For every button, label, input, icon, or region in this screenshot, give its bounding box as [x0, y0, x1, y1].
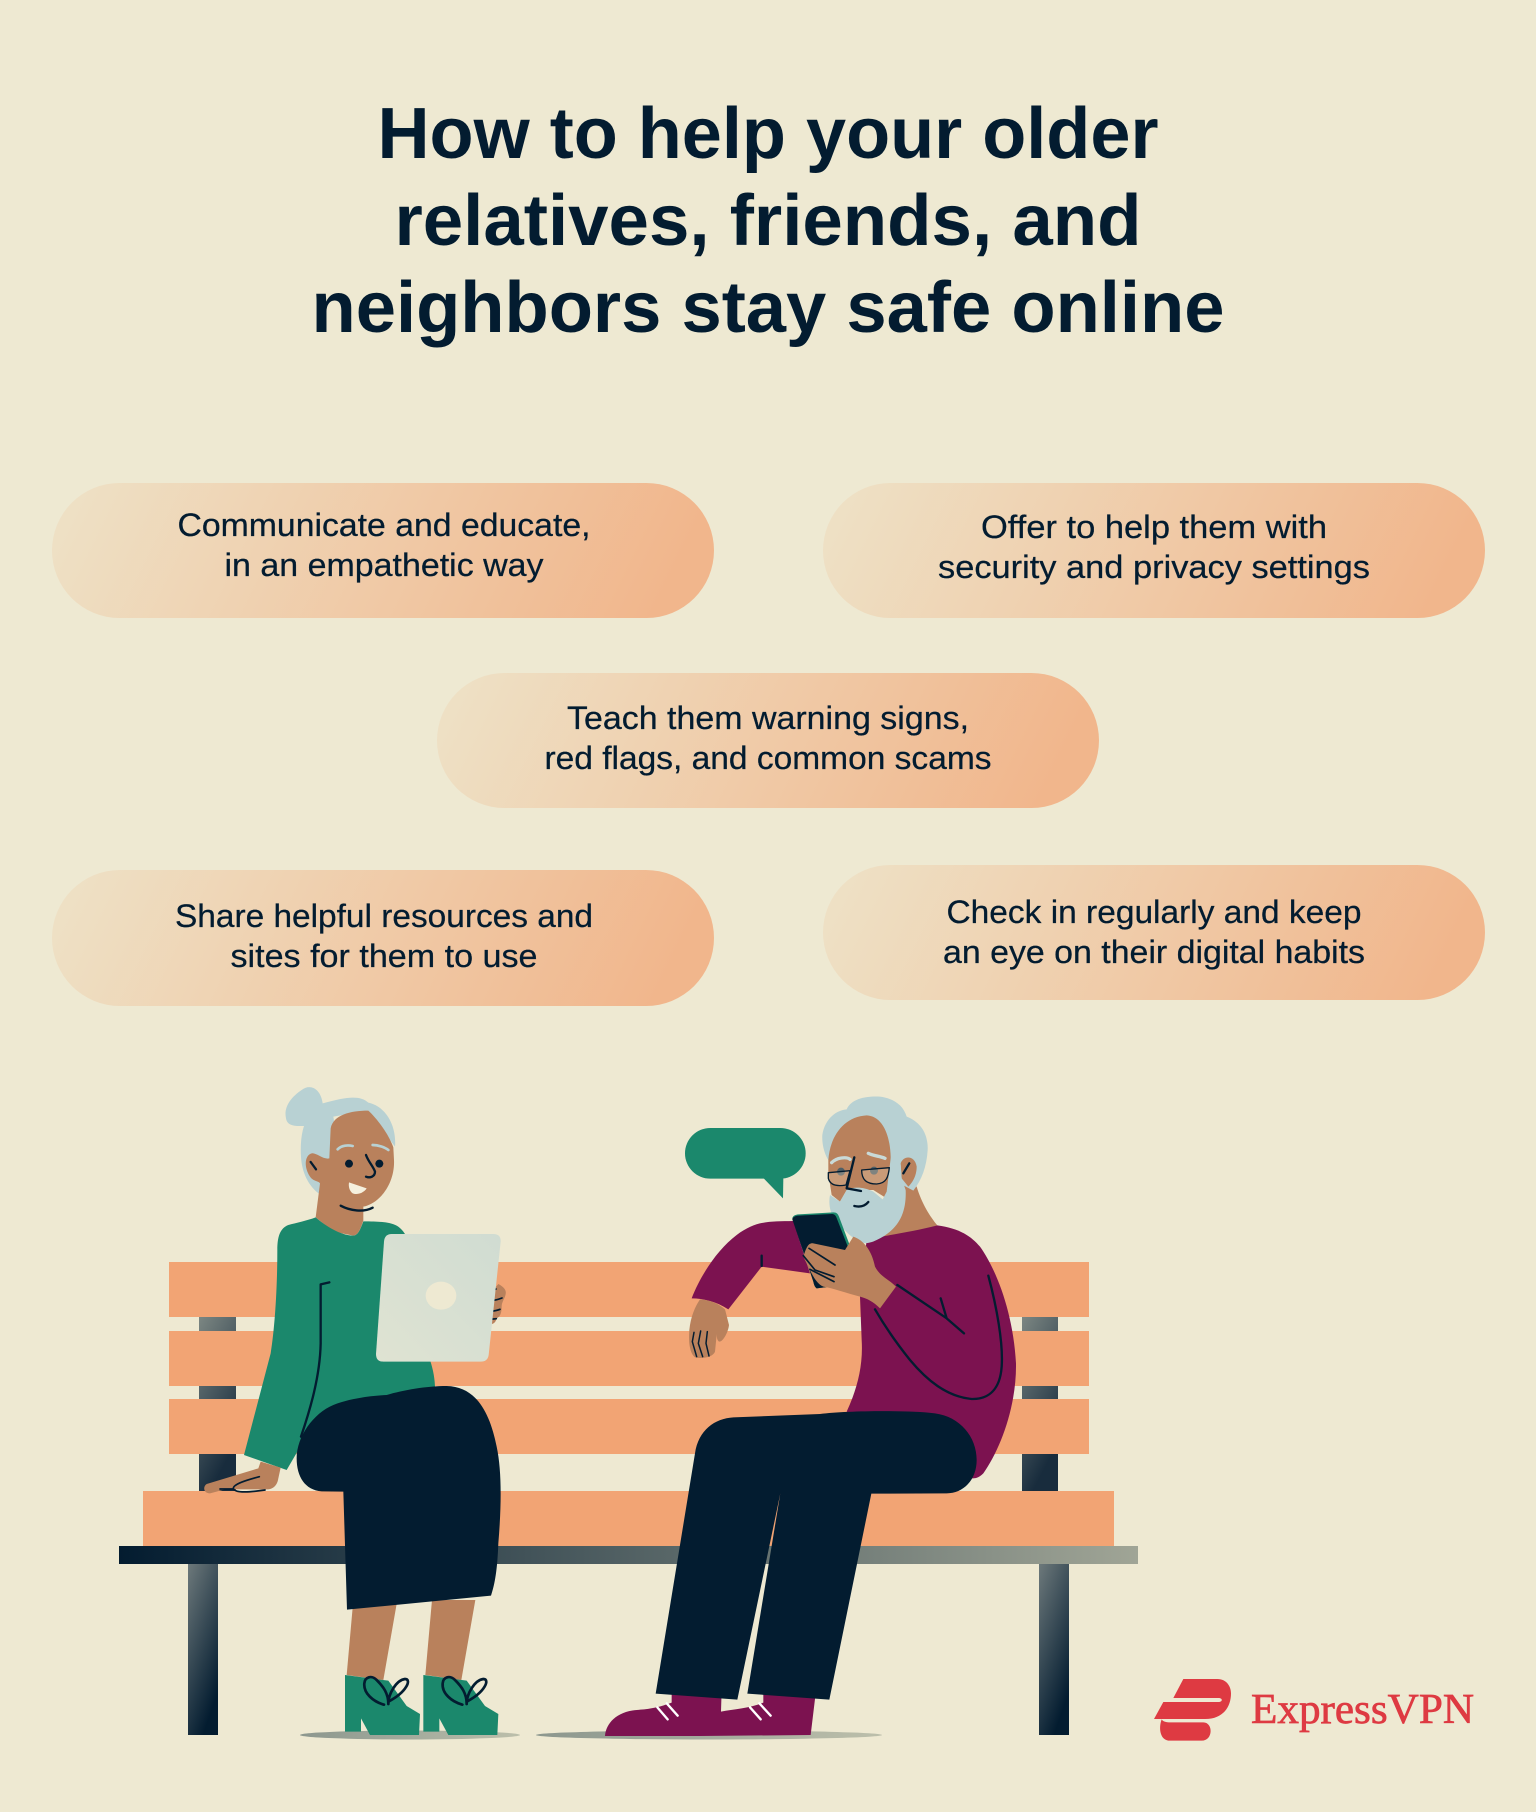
illustration: woman with tablet [204, 1087, 506, 1735]
speech bubble [685, 1128, 806, 1198]
logo wordmark: ExpressVPN [1251, 1687, 1474, 1733]
woman face details [311, 1145, 388, 1211]
man shoes [605, 1690, 816, 1736]
panel: communicate and educate: Communicate and educate, [178, 507, 590, 543]
woman skirt [297, 1386, 501, 1610]
panel: security and privacy settings [823, 483, 1485, 618]
panel: helpful resources [52, 870, 714, 1006]
panel: warning signs [437, 673, 1099, 808]
title: relatives, friends, and [394, 181, 1142, 261]
panel: warning signs: red flags, and common scams [544, 740, 992, 776]
illustration: man with phone [605, 1097, 1016, 1736]
panel: helpful resources: Share helpful resources and [175, 898, 593, 934]
panel: security and privacy settings: security and privacy settings [938, 549, 1370, 585]
title: neighbors stay safe online [312, 268, 1224, 348]
ground shadow: man [536, 1730, 882, 1740]
panel: communicate and educate [52, 483, 714, 618]
tablet [376, 1234, 501, 1362]
title: How to help your older [378, 94, 1158, 174]
panel: security and privacy settings: Offer to help them with [981, 509, 1327, 545]
title [312, 94, 1224, 348]
woman upper body [244, 1087, 506, 1470]
panel: check in regularly [823, 865, 1485, 1000]
panel: helpful resources: sites for them to use [230, 938, 538, 974]
woman legs and shoes [345, 1600, 498, 1735]
logo mark [1154, 1679, 1231, 1741]
man upper body [685, 1097, 1016, 1478]
man trousers [656, 1411, 977, 1700]
logo: ExpressVPN [1154, 1679, 1474, 1741]
panel: communicate and educate: in an empathetic way [224, 547, 544, 583]
man head [822, 1097, 928, 1243]
panel: warning signs: Teach them warning signs, [567, 700, 969, 736]
woman hand on bench [204, 1386, 501, 1610]
man hand [803, 1237, 896, 1308]
ground shadow: woman [300, 1730, 520, 1740]
phone [792, 1212, 854, 1288]
panel: check in regularly: Check in regularly and keep [946, 894, 1362, 930]
panel: check in regularly: an eye on their digital habits [943, 934, 1365, 970]
illustration: park bench [119, 1262, 1138, 1735]
